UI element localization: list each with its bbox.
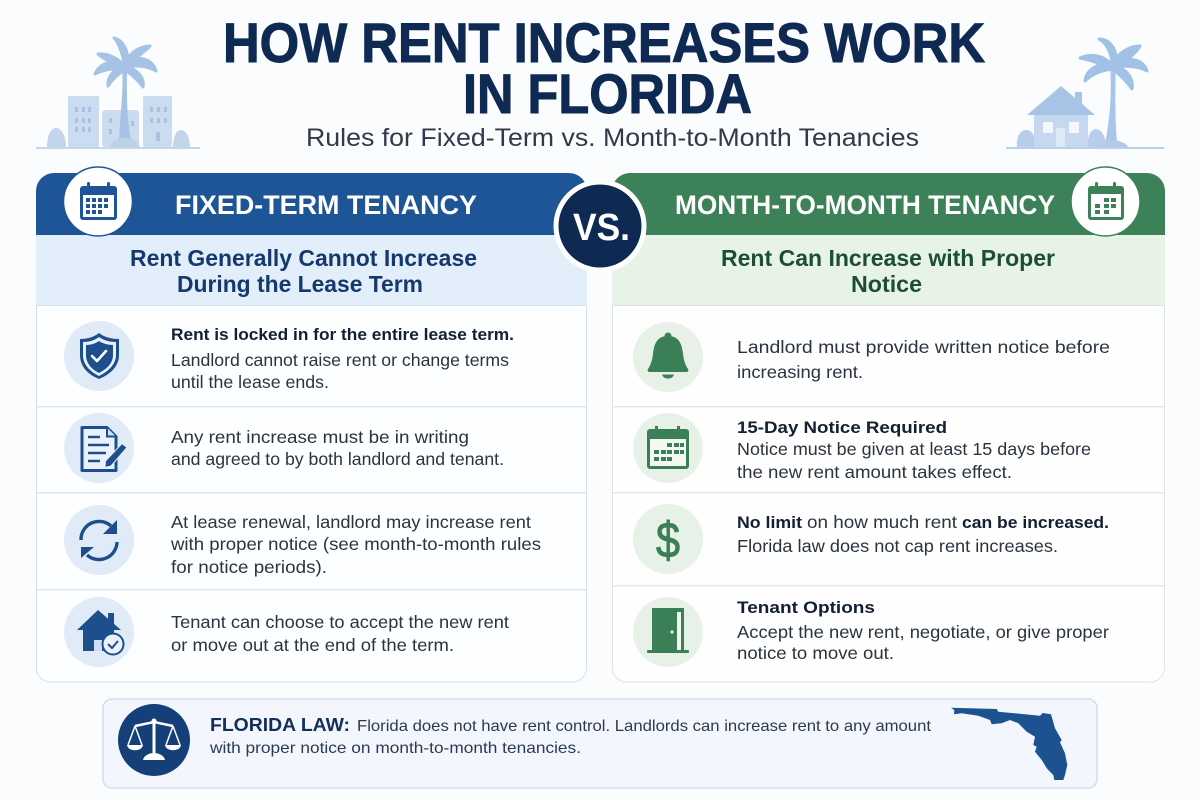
text: no limit xyxy=(737,512,1109,556)
map: florida xyxy=(951,708,1067,780)
panel heading: MONTH-TO-MONTH TENANCY xyxy=(675,190,1055,220)
text: 15-day notice xyxy=(737,418,1091,482)
text: at renewal xyxy=(170,512,541,577)
text: tenant options: notice to move out. xyxy=(737,643,894,663)
header icon: calendar xyxy=(64,167,132,236)
text: in writing xyxy=(171,427,504,469)
text: written notice: increasing rent. xyxy=(737,362,863,382)
text: florida law note: Florida does not have rent control. Landlords can increase rent to any amount xyxy=(357,718,932,735)
panel: fixed-term tenancy xyxy=(36,167,587,682)
panel heading: FIXED-TERM TENANCY xyxy=(175,190,477,220)
icon: house with check xyxy=(64,597,134,667)
text: locked in: Rent is locked in for the entire lease term. xyxy=(171,325,514,344)
text: locked in: Landlord cannot raise rent or change terms xyxy=(171,350,509,370)
panel subheading xyxy=(130,245,477,297)
text: florida law note xyxy=(209,715,932,757)
title xyxy=(223,11,985,125)
icon: renewal arrows xyxy=(64,505,134,575)
text: no limit: No limit xyxy=(737,513,802,532)
icon: dollar sign: $ xyxy=(656,512,680,568)
text: no limit: on how much rent xyxy=(807,512,957,532)
panel subheading: Rent Generally Cannot Increase xyxy=(130,245,477,271)
panel subheading xyxy=(721,245,1055,297)
text: tenant choice: or move out at the end of the term. xyxy=(171,635,454,655)
text: in writing: Any rent increase must be in writing xyxy=(171,427,469,447)
text: at renewal: At lease renewal, landlord may increase rent xyxy=(171,512,531,532)
text: in writing: and agreed to by both landlord and tenant. xyxy=(171,449,504,469)
title: HOW RENT INCREASES WORK xyxy=(223,11,985,74)
icon: bell xyxy=(633,322,703,392)
icon: scales of justice xyxy=(118,704,190,776)
text: no limit: Florida law does not cap rent increases. xyxy=(737,536,1058,556)
text: tenant choice: Tenant can choose to accept the new rent xyxy=(171,612,509,632)
text: locked in: until the lease ends. xyxy=(171,372,329,392)
illustration: house and palm xyxy=(1006,39,1164,149)
panel: month-to-month tenancy xyxy=(612,167,1165,682)
panel subheading: During the Lease Term xyxy=(177,271,423,297)
icon: document and pen xyxy=(64,413,134,483)
text: 15-day notice: the new rent amount takes effect. xyxy=(737,462,1012,482)
text: tenant options: Accept the new rent, negotiate, or give proper xyxy=(737,622,1109,642)
icon: dollar sign xyxy=(633,504,703,574)
text: tenant options xyxy=(737,598,1109,663)
text: at renewal: for notice periods). xyxy=(171,557,327,577)
title: IN FLORIDA xyxy=(463,62,752,125)
text: at renewal: with proper notice (see month-to-month rules xyxy=(170,534,541,554)
text: 15-day notice: Notice must be given at least 15 days before xyxy=(737,439,1091,459)
subtitle: Rules for Fixed-Term vs. Month-to-Month Tenancies xyxy=(306,124,919,152)
text: written notice: Landlord must provide written notice before xyxy=(737,337,1110,357)
vs badge: VS. xyxy=(573,207,630,249)
illustration: city buildings and palm xyxy=(36,38,200,149)
vs badge xyxy=(554,180,646,272)
icon: door xyxy=(633,597,703,667)
text: 15-day notice: 15-Day Notice Required xyxy=(737,418,947,437)
text: locked in xyxy=(171,325,514,392)
callout: florida law xyxy=(103,699,1097,788)
text: florida law note: with proper notice on month-to-month tenancies. xyxy=(209,740,581,757)
icon: shield xyxy=(64,321,134,391)
text: written notice xyxy=(737,337,1110,382)
panel subheading: Rent Can Increase with Proper xyxy=(721,245,1055,271)
text: tenant choice xyxy=(171,612,509,655)
text: florida law note: FLORIDA LAW: xyxy=(210,715,350,735)
icon: calendar xyxy=(633,413,703,483)
text: tenant options: Tenant Options xyxy=(737,598,875,617)
panel subheading: Notice xyxy=(851,271,922,297)
text: no limit: can be increased. xyxy=(962,513,1109,532)
header icon: calendar xyxy=(1071,167,1140,236)
